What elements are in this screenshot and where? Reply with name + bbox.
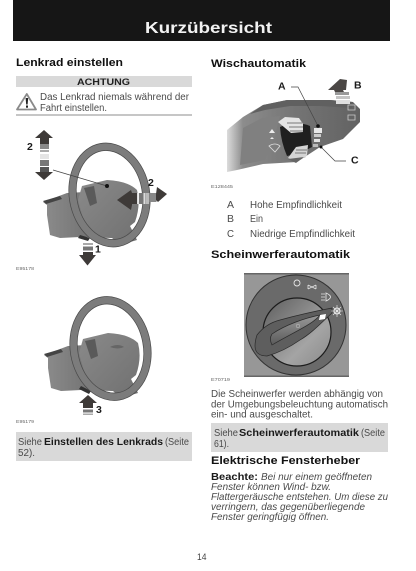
barrel: [280, 123, 312, 156]
reference box: Lenkrad: Siehe: [18, 437, 42, 448]
caption: E128445: [211, 184, 234, 189]
arrow: down 1: [79, 243, 96, 266]
title: Kurzübersicht: [145, 20, 273, 37]
body text: Die Scheinwerfer werden abhängig von: [211, 389, 383, 400]
panel: Scheinwerferautomatik: [211, 249, 388, 452]
legend list: Ein: [250, 214, 263, 225]
heading: Elektrische Fensterheber: Elektrische Fensterheber: [211, 455, 361, 467]
arrow: up 3: [79, 395, 97, 415]
heading: Scheinwerferautomatik: Scheinwerferautomatik: [211, 249, 351, 261]
note text: verringern, das gegenüberliegende: [211, 502, 365, 513]
note text: Beachte:: [211, 472, 258, 483]
reference box: Scheinwerfer: Scheinwerferautomatik: [239, 428, 359, 439]
reference box: Scheinwerfer: (Seite: [361, 428, 385, 439]
illustration: wiper stalk: [227, 79, 362, 172]
warning box: [16, 76, 192, 116]
switch handle: [255, 308, 332, 356]
legend list: B: [227, 214, 234, 225]
reference box: Lenkrad: Einstellen des Lenkrads: [44, 437, 163, 448]
panel: Wischautomatik: [211, 58, 362, 240]
warning box: Fahrt einstellen.: [40, 103, 107, 114]
legend list: A: [227, 200, 234, 211]
body text: [211, 389, 388, 420]
steering column: [43, 192, 113, 238]
legend list: C: [227, 229, 234, 240]
note text: Fenster können Wind- bzw.: [211, 482, 331, 493]
wheel ring: [65, 141, 154, 249]
note text: Flattergeräusche entstehen. Um diese zu: [211, 492, 388, 503]
illustration: steering wheel release: [44, 290, 159, 416]
switch symbols: [294, 280, 300, 286]
heading: Wischautomatik: Wischautomatik: [211, 58, 307, 70]
body text: der Umgebungsbeleuchtung automatisch: [211, 400, 388, 410]
note text: [211, 472, 388, 523]
label B: B: [354, 80, 362, 92]
hub and lower spoke: [78, 180, 139, 245]
label 1: 1: [95, 244, 101, 256]
legend list: Niedrige Empfindlichkeit: [250, 229, 355, 240]
mid bars: [314, 128, 322, 133]
note text: Fenster geringfügig öffnen.: [211, 512, 329, 523]
legend list: Hohe Empfindlichkeit: [250, 200, 342, 211]
caption: E95179: [16, 419, 34, 424]
arrow: barrel down: [288, 145, 308, 162]
icon: warning triangle: [17, 94, 36, 110]
arrow: horizontal 2: [117, 187, 167, 210]
page number: 14: [197, 552, 206, 563]
note text: Bei nur einem geöffneten: [261, 472, 372, 483]
illustration: steering wheel adjust: [27, 130, 167, 266]
illustration: headlight switch: [244, 273, 349, 377]
caption: E70719: [211, 377, 231, 382]
header bar: [13, 0, 390, 41]
arrow: B: [328, 79, 350, 104]
label C with leader: C: [351, 154, 359, 166]
panel: Lenkrad einstellen: [16, 57, 192, 461]
reference box: Lenkrad: (Seite: [165, 437, 189, 448]
panel: Elektrische Fensterheber: [211, 455, 388, 523]
warning box: Das Lenkrad niemals während der: [40, 92, 190, 103]
arrow: vertical 2: [35, 130, 53, 180]
reference box: Lenkrad: [16, 432, 192, 461]
label 2 right: 2: [148, 177, 154, 189]
body text: ein- und ausgeschaltet.: [211, 410, 313, 420]
label 3: 3: [96, 404, 102, 416]
stalk symbols: [348, 105, 355, 120]
lever: [78, 235, 90, 241]
legend list: [227, 200, 355, 240]
reference box: Scheinwerfer: 61).: [214, 439, 229, 450]
label 2: 2: [27, 141, 33, 153]
reference box: Lenkrad: 52).: [18, 448, 35, 459]
reference box: Scheinwerfer: [211, 423, 388, 452]
label A with leader: A: [278, 80, 286, 92]
caption: E95178: [16, 266, 34, 271]
heading: Lenkrad einstellen: Lenkrad einstellen: [16, 57, 123, 69]
arrow: barrel up: [278, 117, 303, 133]
warning box: ACHTUNG: [77, 77, 130, 87]
reference box: Scheinwerfer: Siehe: [214, 428, 238, 439]
pointer line: [53, 170, 107, 186]
